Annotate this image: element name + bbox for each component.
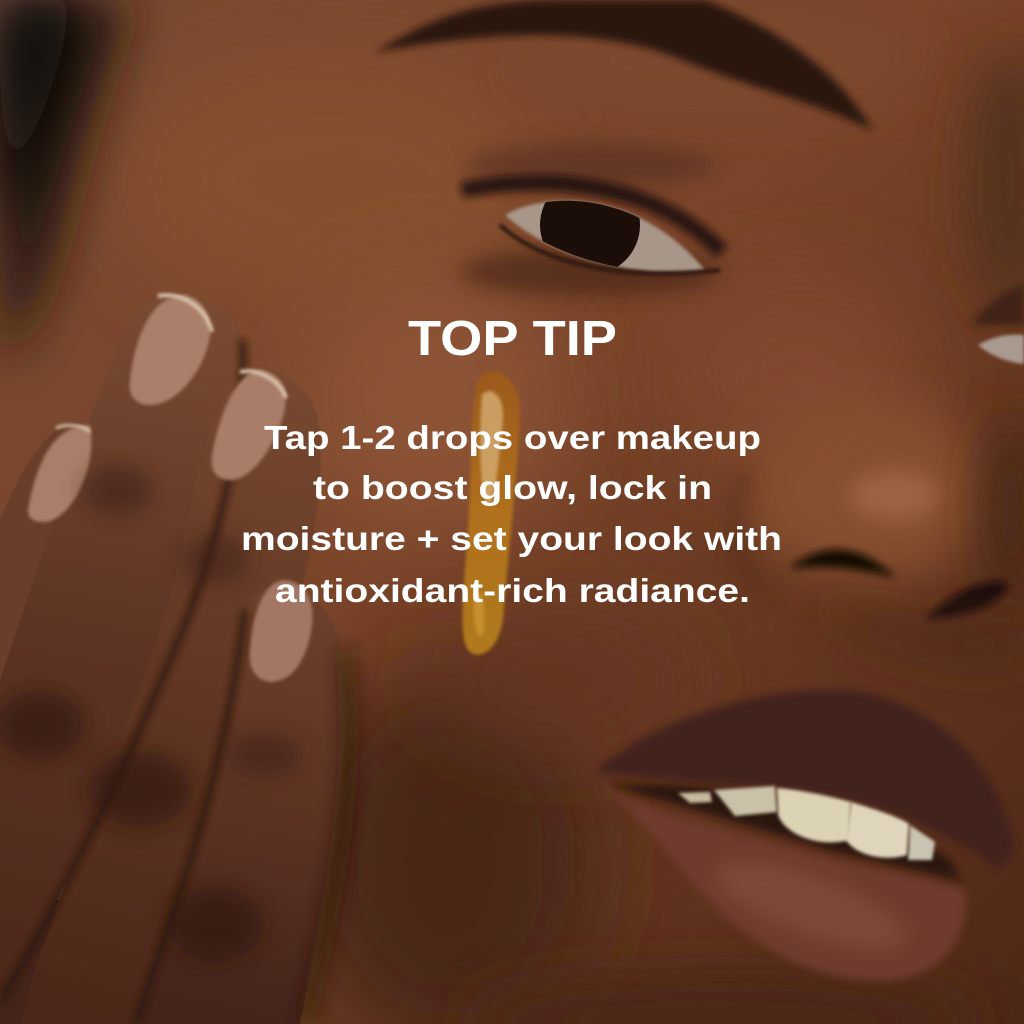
tip text block: to boost glow, lock in [313,470,712,507]
finger: outer left [0,422,90,700]
fingernails [28,425,91,522]
finger: ring [135,586,345,1024]
oil drop streak [463,372,519,655]
hand with fingers [0,295,349,1024]
tip text block: antioxidant-rich radiance. [275,573,750,610]
second eye at right edge [970,284,1024,364]
tip text block: moisture + set your look with [241,521,782,558]
hair at top left [0,0,130,365]
eyebrow [375,0,872,130]
heading: TOP TIP: TOP TIP [408,312,617,366]
knuckles [0,690,85,760]
finger: index [0,295,243,1000]
lips and teeth [595,690,1015,980]
finger shadows between fingers [0,340,243,1000]
nose [734,400,1024,662]
tip text block [241,420,782,610]
finger: middle [20,367,321,1024]
eye [460,143,722,296]
tip text block: Tap 1-2 drops over makeup [264,420,761,457]
